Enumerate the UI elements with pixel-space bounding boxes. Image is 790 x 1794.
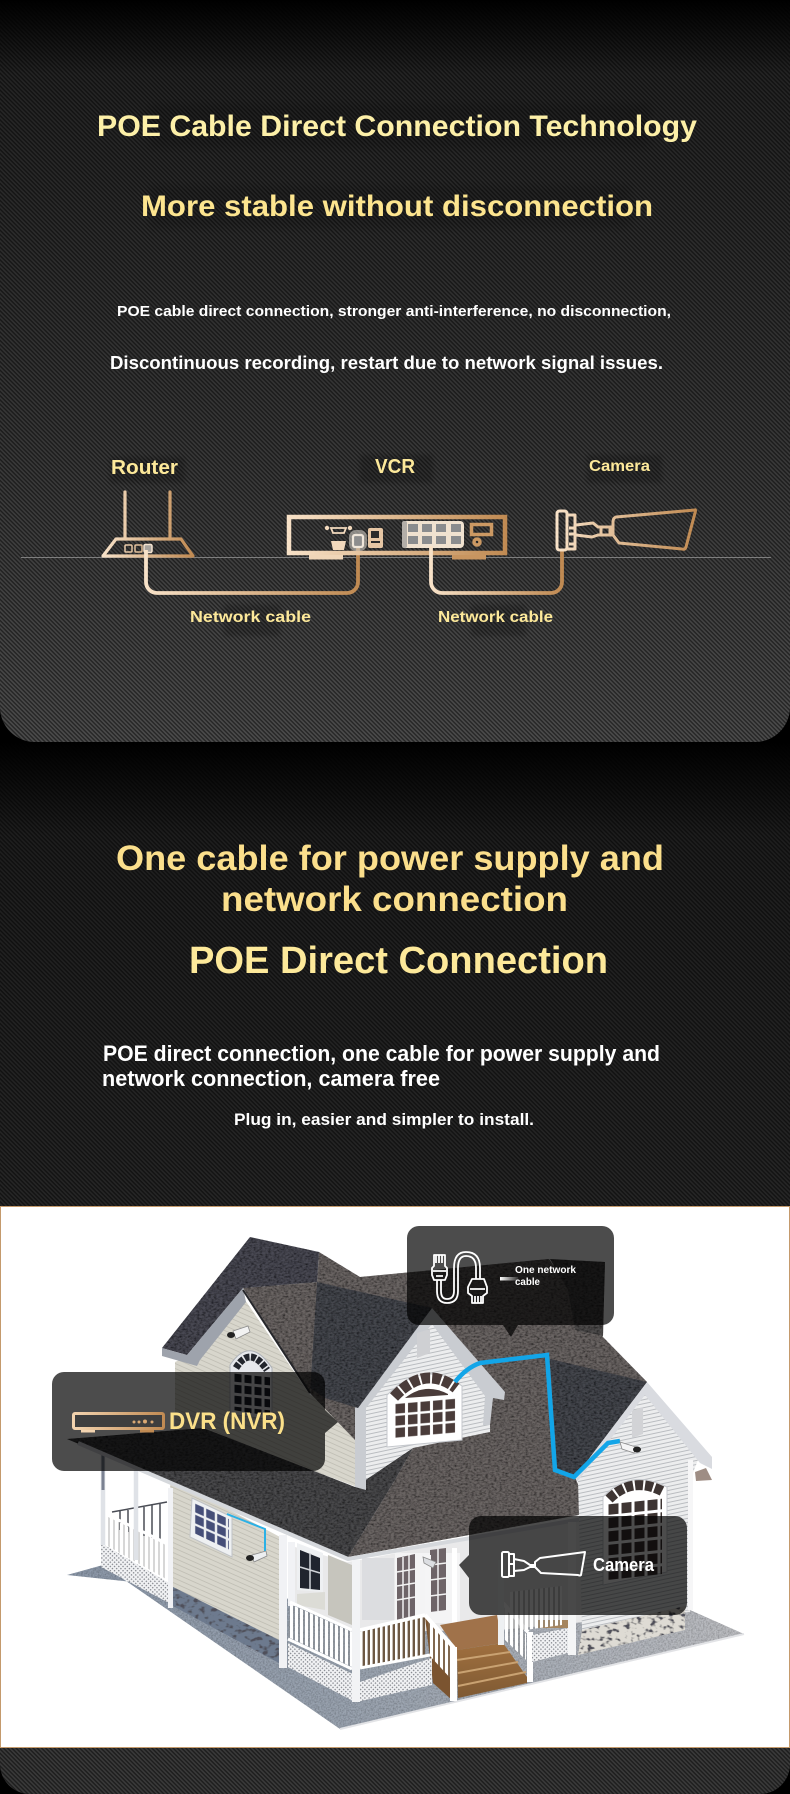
stair railing	[425, 1560, 533, 1701]
central arched window	[387, 1374, 462, 1447]
central gable trim	[355, 1308, 505, 1490]
corner post	[168, 1488, 295, 1668]
front porch back wall	[295, 1515, 690, 1632]
callout: one network cable	[407, 1226, 614, 1337]
label: DVR (NVR): DVR (NVR)	[169, 1408, 285, 1435]
text: POE direct connection description: POE direct connection, one cable for power supply and	[103, 1041, 660, 1066]
panel: second section background	[0, 742, 790, 1206]
icon: camera white	[502, 1552, 585, 1577]
front railing	[288, 1555, 432, 1702]
porch front floor	[440, 1615, 502, 1650]
heading: network connection: network connection	[221, 880, 568, 919]
stone foundation left	[173, 1587, 279, 1663]
right arched window	[603, 1479, 667, 1585]
front stairs	[425, 1617, 527, 1700]
label: Camera: Camera	[589, 458, 650, 475]
icon: network cable	[432, 1252, 487, 1303]
central gable wall	[355, 1322, 490, 1487]
side window	[190, 1498, 232, 1557]
porch dark window	[297, 1543, 352, 1625]
front doors	[362, 1548, 460, 1623]
icon: DVR	[74, 1414, 164, 1432]
camera on right gable	[620, 1442, 641, 1453]
label: Router: Router	[111, 457, 178, 479]
blue network cable on side wall	[227, 1514, 265, 1551]
grey hip	[243, 1282, 317, 1393]
left wall upper	[175, 1297, 357, 1487]
panel: POE cable direct connection	[0, 0, 790, 742]
left gable trim	[162, 1288, 246, 1366]
icon: router	[103, 492, 193, 556]
lower roof eave	[78, 1443, 600, 1559]
dark right gable roof	[550, 1359, 647, 1477]
text backing shadows	[110, 104, 662, 636]
floor line	[21, 556, 771, 558]
label: VCR: VCR	[375, 456, 416, 478]
porch posts right	[535, 1522, 576, 1655]
chimney	[550, 1259, 605, 1336]
icon: network cable router to VCR	[146, 540, 358, 593]
icon: VCR recorder	[289, 517, 505, 560]
label: Network cable left: Network cable	[190, 609, 311, 626]
label: one network cable: cable	[515, 1277, 540, 1288]
house illustration	[67, 1237, 744, 1729]
left porch	[101, 1450, 169, 1603]
camera on porch	[423, 1557, 436, 1568]
callout: Camera	[459, 1516, 687, 1615]
label: one network cable: One network	[515, 1265, 576, 1276]
title: POE cable direct connection technology: POE Cable Direct Connection Technology	[97, 110, 697, 143]
panel: bottom strip	[0, 1747, 790, 1794]
icon: network cable VCR to camera	[431, 546, 562, 593]
callout: DVR (NVR)	[52, 1372, 338, 1471]
label: Camera: Camera	[593, 1555, 655, 1575]
text: plug in: Plug in, easier and simpler to install.	[234, 1110, 534, 1129]
label: one network cable	[515, 1265, 576, 1288]
heading: POE direct connection: POE Direct Connection	[189, 940, 608, 982]
left gable line	[243, 1290, 310, 1393]
ground slab	[67, 1565, 744, 1729]
left side wall	[170, 1478, 280, 1642]
dark lower roof	[67, 1428, 413, 1557]
right gable trim	[575, 1382, 712, 1610]
grey main roof	[310, 1252, 647, 1557]
left arched window	[230, 1351, 272, 1420]
small camera on left gable	[227, 1326, 250, 1339]
right porch lattice	[532, 1628, 568, 1662]
porch railing right	[510, 1586, 562, 1632]
stone foundation right	[578, 1606, 685, 1655]
dash	[500, 1277, 518, 1280]
blue network cable on roof	[455, 1355, 620, 1477]
panel: white house panel	[0, 1206, 790, 1748]
label: Network cable right: Network cable	[438, 609, 553, 626]
camera on side wall	[246, 1551, 267, 1562]
text: discontinuous recording description: Discontinuous recording, restart due to network signal issues.	[110, 353, 663, 373]
right gable wall	[578, 1388, 700, 1632]
text: anti-interference description: POE cable direct connection, stronger anti-interference, no disconnection,	[117, 303, 671, 320]
dark roof central left	[310, 1282, 432, 1408]
icon: camera	[557, 510, 696, 550]
text: camera free: network connection, camera free	[102, 1066, 440, 1091]
title: more stable without disconnection: More stable without disconnection	[141, 190, 653, 223]
upper dark roof	[162, 1237, 319, 1355]
heading: one cable for power supply: One cable for power supply and	[116, 839, 664, 878]
